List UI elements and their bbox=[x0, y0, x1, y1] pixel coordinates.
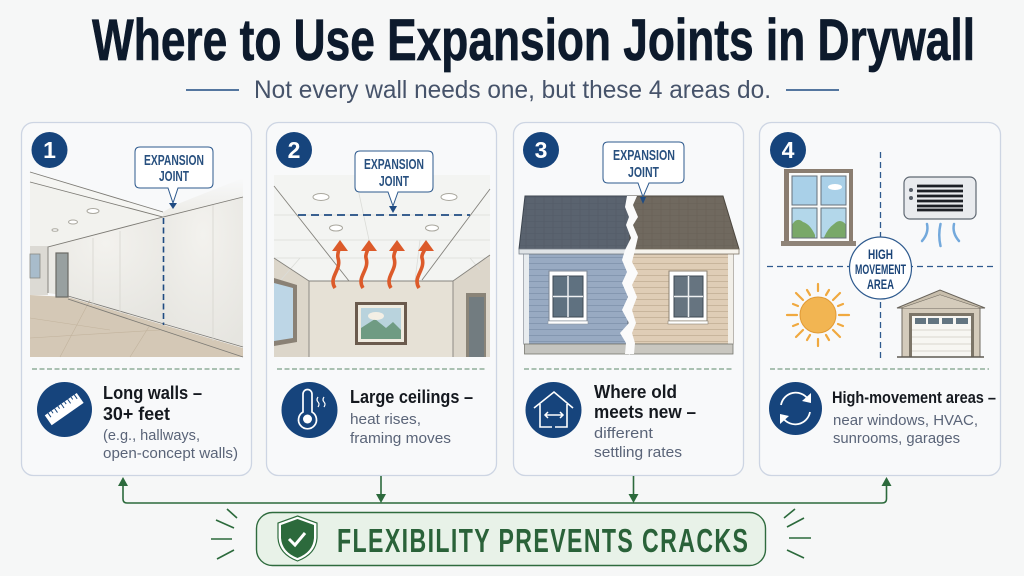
number badge 3 bbox=[523, 132, 559, 168]
illustration: long wall room bbox=[30, 172, 243, 357]
number badge 2 bbox=[276, 132, 312, 168]
text: long walls: open-concept walls) bbox=[103, 445, 238, 462]
crack bbox=[620, 196, 638, 354]
icon: house with arrows bbox=[526, 382, 582, 438]
high movement area badge: MOVEMENT bbox=[855, 261, 906, 277]
icon: garage bbox=[897, 290, 985, 357]
text: high-movement areas: near windows, HVAC, bbox=[833, 412, 978, 429]
dashed joint line bbox=[298, 214, 470, 216]
panel: high-movement areas bbox=[760, 122, 1000, 476]
banner: flexibility prevents cracks bbox=[256, 512, 766, 566]
illustration: split house bbox=[519, 196, 739, 354]
text: long walls: (e.g., hallways, bbox=[103, 427, 200, 444]
icon: window bbox=[781, 169, 856, 246]
high movement area badge: HIGH bbox=[868, 246, 893, 262]
text: old meets new: different bbox=[594, 425, 654, 442]
callout: expansion joint: EXPANSION bbox=[364, 156, 424, 173]
text: old meets new bbox=[594, 382, 696, 461]
text: old meets new: meets new – bbox=[594, 402, 696, 422]
window left bbox=[548, 271, 588, 324]
text: large ceilings: Large ceilings – bbox=[350, 387, 473, 407]
number badge 3: 3 bbox=[535, 137, 547, 163]
callout: expansion joint: EXPANSION bbox=[144, 152, 204, 169]
callout: expansion joint bbox=[135, 147, 213, 209]
dashed cross lines bbox=[767, 152, 993, 362]
heat arrows bbox=[332, 240, 434, 288]
window right bbox=[668, 271, 708, 324]
picture frame bbox=[355, 302, 407, 345]
text: large ceilings bbox=[350, 387, 473, 447]
text: long walls: 30+ feet bbox=[103, 404, 170, 424]
rays left bbox=[211, 509, 237, 559]
text: long walls bbox=[103, 383, 238, 462]
icon: air conditioner bbox=[904, 177, 976, 246]
text: high-movement areas: sunrooms, garages bbox=[833, 430, 960, 447]
text: high-movement areas: High-movement areas – bbox=[832, 388, 996, 407]
number badge 4: 4 bbox=[782, 137, 795, 163]
panel: old meets new bbox=[514, 122, 744, 476]
text: large ceilings: heat rises, bbox=[350, 411, 421, 428]
callout: expansion joint bbox=[603, 142, 684, 204]
text: old meets new: settling rates bbox=[594, 444, 682, 461]
panel: large ceilings bbox=[266, 122, 496, 476]
high movement area badge bbox=[850, 237, 912, 299]
high movement area badge: AREA bbox=[867, 276, 894, 292]
rays right bbox=[784, 509, 811, 558]
icon: thermometer bbox=[282, 382, 338, 438]
text: large ceilings: framing moves bbox=[350, 430, 451, 447]
callout: expansion joint: EXPANSION bbox=[613, 147, 675, 164]
dashed joint line bbox=[162, 218, 164, 325]
callout: expansion joint: JOINT bbox=[628, 164, 659, 181]
subtitle: Not every wall needs one, but these 4 areas do. bbox=[254, 76, 771, 104]
callout: expansion joint: JOINT bbox=[379, 173, 409, 190]
panel: long walls bbox=[22, 122, 252, 476]
number badge 1 bbox=[32, 132, 68, 168]
banner: flexibility prevents cracks: FLEXIBILITY PREVENTS CRACKS bbox=[337, 523, 748, 560]
illustration: ceiling room bbox=[274, 175, 490, 357]
icon: cycle arrows bbox=[769, 382, 822, 435]
icon: ruler bbox=[37, 382, 92, 437]
text: old meets new: Where old bbox=[594, 382, 677, 402]
number badge 2: 2 bbox=[288, 137, 300, 163]
callout: expansion joint: JOINT bbox=[159, 168, 189, 185]
icon: shield bbox=[278, 516, 317, 561]
text: high-movement areas bbox=[832, 388, 996, 447]
number badge 1: 1 bbox=[43, 137, 56, 163]
callout: expansion joint bbox=[355, 151, 433, 213]
text: long walls: Long walls – bbox=[103, 383, 202, 403]
number badge 4 bbox=[770, 132, 806, 168]
icon: sun bbox=[787, 284, 849, 346]
arrows: connector bbox=[118, 476, 892, 503]
